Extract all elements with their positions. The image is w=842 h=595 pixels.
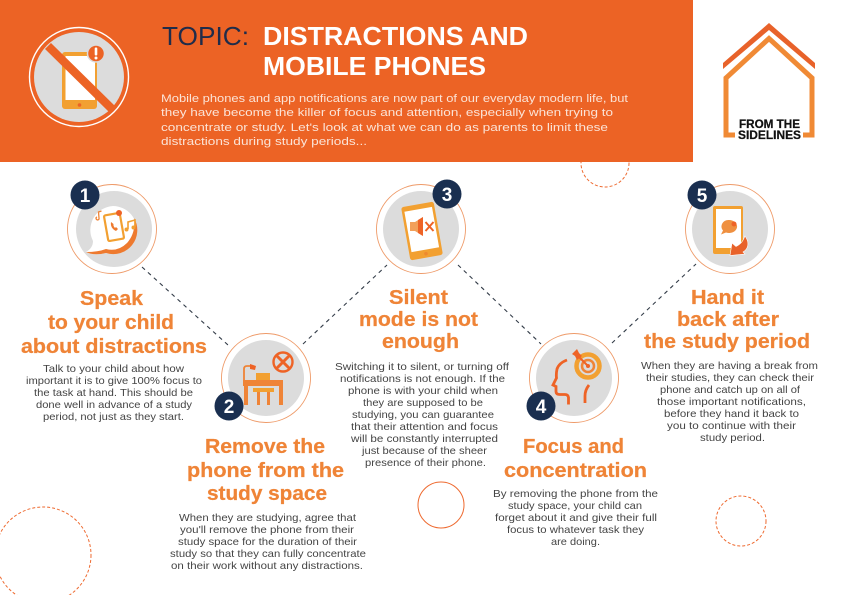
step 2 body: study space for the duration of their [178, 536, 358, 548]
number badge 1: 1 [80, 186, 91, 207]
step 4 icon [526, 334, 618, 422]
heading: DISTRACTIONS AND [263, 21, 528, 51]
step 5 body: you to continue with their [667, 420, 797, 432]
step 4 heading [504, 436, 647, 482]
step 3 body: presence of their phone. [365, 457, 486, 469]
intro paragraph [161, 93, 629, 148]
step 4 body: By removing the phone from the [493, 488, 658, 500]
step 1 body: important it is to give 100% focus to [26, 375, 202, 387]
step 1 body: Talk to your child about how [43, 363, 184, 375]
logo: From the Sidelines: SIDELINES [738, 128, 801, 142]
step 1 heading: to your child [48, 312, 174, 334]
step 5 heading: back after [677, 309, 779, 331]
step 1 body [26, 363, 202, 423]
step 3 body: notifications is not enough. If the [340, 373, 505, 385]
step 3 heading: Silent [389, 287, 448, 309]
step 3 heading [359, 287, 478, 353]
step 3 body [335, 361, 509, 469]
step 2 body: you'll remove the phone from their [180, 524, 355, 536]
step 3 body: phone is with your child when [348, 385, 498, 397]
step 4 heading: concentration [504, 460, 647, 482]
heading: TOPIC: [162, 21, 249, 51]
step 5 body: phone and catch up on all of [660, 384, 800, 396]
step 4 heading: Focus and [523, 436, 624, 458]
icon: speech bubble with phone [86, 206, 137, 254]
step 2 text [170, 436, 366, 572]
step 5 heading [644, 287, 810, 353]
number badge 2: 2 [224, 397, 234, 418]
step 2 body: study so that they can fully concentrate [170, 548, 366, 560]
heading [162, 21, 528, 81]
step 1 heading [21, 288, 207, 358]
step 2 body [170, 512, 366, 572]
header banner [0, 0, 693, 162]
step 3 heading: mode is not [359, 309, 478, 331]
step 5 heading: the study period [644, 331, 810, 353]
step 2 body: on their work without any distractions. [171, 560, 363, 572]
number badge 5: 5 [697, 186, 708, 207]
step 3 text [335, 287, 509, 469]
step 3 body: that their attention and focus [351, 421, 498, 433]
step 1 body: done well in advance of a study [36, 399, 193, 411]
step 4 text [493, 436, 658, 548]
icon: study desk with crossed circle [243, 352, 292, 405]
logo: From the Sidelines [723, 23, 815, 142]
logo: From the Sidelines: FROM THE [739, 117, 800, 131]
intro paragraph: distractions during study periods... [161, 136, 367, 148]
step 1 body: period, not just as they start. [43, 411, 184, 423]
step 2 body: When they are studying, agree that [179, 512, 356, 524]
step 1 heading: about distractions [21, 336, 207, 358]
intro paragraph: concentrate or study. Let's look at what we can do as parents to limit these [161, 122, 608, 134]
step 3 icon [376, 180, 466, 274]
step 2 heading: phone from the [187, 460, 344, 482]
step 3 body: they are supposed to be [363, 397, 483, 409]
heading: MOBILE PHONES [263, 51, 486, 81]
step 5 icon [686, 180, 774, 274]
step 1 heading: Speak [80, 288, 144, 310]
step 1 text [21, 288, 207, 423]
step 5 heading: Hand it [691, 287, 764, 309]
step 5 body: When they are having a break from [641, 360, 818, 372]
step 2 heading: study space [207, 483, 327, 505]
step 5 body: those important notifications, [657, 396, 806, 408]
icon: phone with returning arrow [713, 206, 748, 256]
icon: muted phone [401, 202, 443, 260]
step 4 body: focus to whatever task they [507, 524, 645, 536]
step 2 heading: Remove the [205, 436, 325, 458]
step 4 body: forget about it and give their full [495, 512, 657, 524]
step 5 body: their studies, they can check their [646, 372, 815, 384]
step 5 text [641, 287, 818, 444]
step 4 body: study space, your child can [508, 500, 642, 512]
number badge 4: 4 [536, 397, 547, 418]
step 1 icon [68, 180, 156, 274]
icon: crossed-out phone [30, 28, 128, 126]
step 3 heading: enough [382, 331, 459, 353]
step 4 body: are doing. [551, 536, 600, 548]
step 2 heading [187, 436, 344, 505]
step 5 body [641, 360, 818, 444]
number badge 3: 3 [442, 185, 452, 206]
step 3 body: Switching it to silent, or turning off [335, 361, 509, 373]
step 3 body: just because of the sheer [361, 445, 488, 457]
step 1 body: the task at hand. This should be [34, 387, 193, 399]
step 5 body: study period. [700, 432, 765, 444]
intro paragraph: Mobile phones and app notifications are now part of our everyday modern life, but [161, 93, 629, 105]
step 4 body [493, 488, 658, 548]
step 3 body: studying, you can guarantee [352, 409, 494, 421]
step 3 body: will be constantly interrupted [350, 433, 498, 445]
step 5 body: before they hand it back to [664, 408, 799, 420]
icon: head with target [553, 349, 600, 404]
step 2 icon [214, 334, 310, 422]
intro paragraph: they have become the killer of focus and attention, especially when trying to [161, 107, 613, 119]
